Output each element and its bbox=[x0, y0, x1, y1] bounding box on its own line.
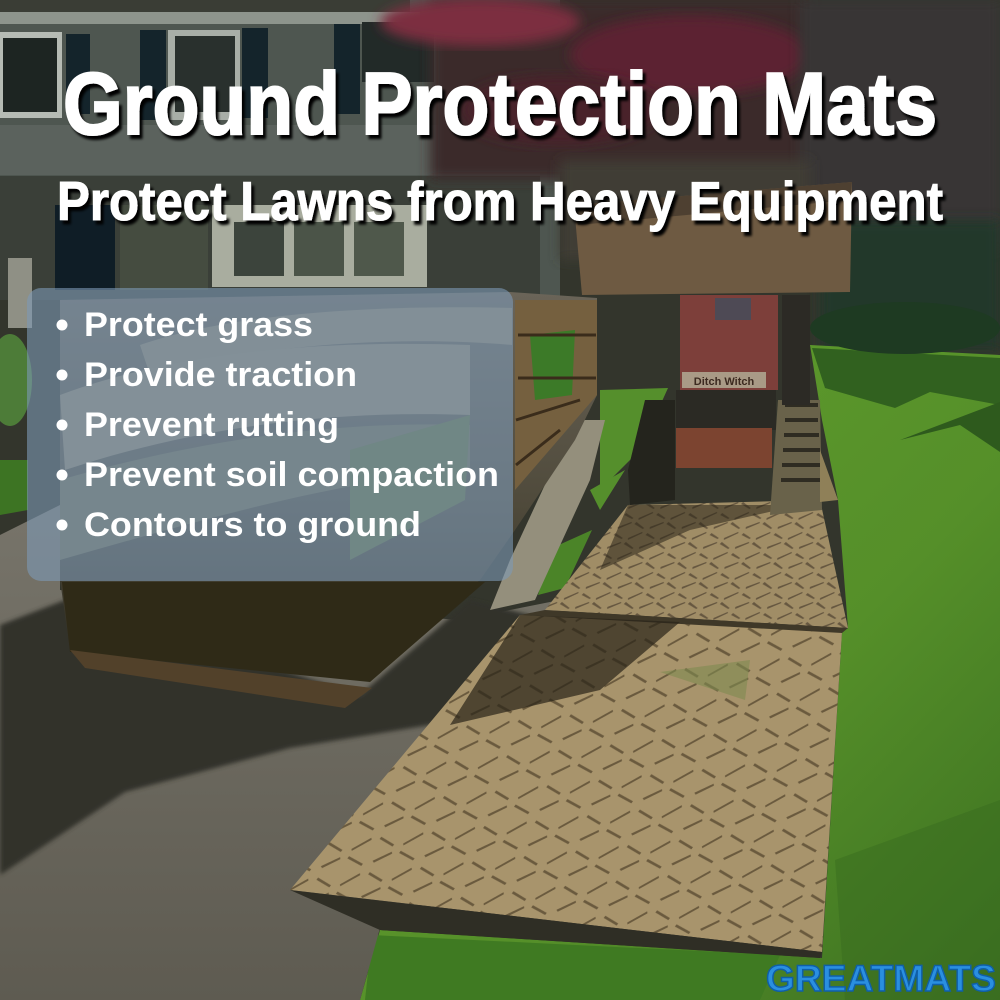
bullet: protect grass: Protect grass bbox=[84, 306, 313, 344]
bullet panel bbox=[27, 288, 513, 581]
shrubs bbox=[0, 302, 1000, 426]
tree foliage bbox=[380, 0, 1000, 350]
bullet: prevent soil compaction: Prevent soil compaction bbox=[84, 456, 499, 494]
mat edges and shadows bbox=[290, 505, 848, 958]
driveway bbox=[0, 420, 605, 1000]
mat lower bbox=[290, 615, 842, 952]
lawn bbox=[0, 345, 1000, 1000]
bullet list bbox=[56, 306, 499, 544]
mat upper bbox=[545, 500, 848, 628]
logo: Greatmats: GREATMATS bbox=[766, 958, 996, 999]
sod rolls bbox=[140, 307, 512, 375]
sod pallet bbox=[60, 292, 597, 708]
skid steer bbox=[574, 182, 852, 515]
bullet: provide traction: Provide traction bbox=[84, 356, 357, 394]
bullet: prevent rutting: Prevent rutting bbox=[84, 406, 339, 444]
bullet: contours to ground: Contours to ground bbox=[84, 506, 421, 544]
skid steer: Ditch Witch bbox=[694, 376, 754, 388]
house facade bbox=[0, 0, 560, 328]
